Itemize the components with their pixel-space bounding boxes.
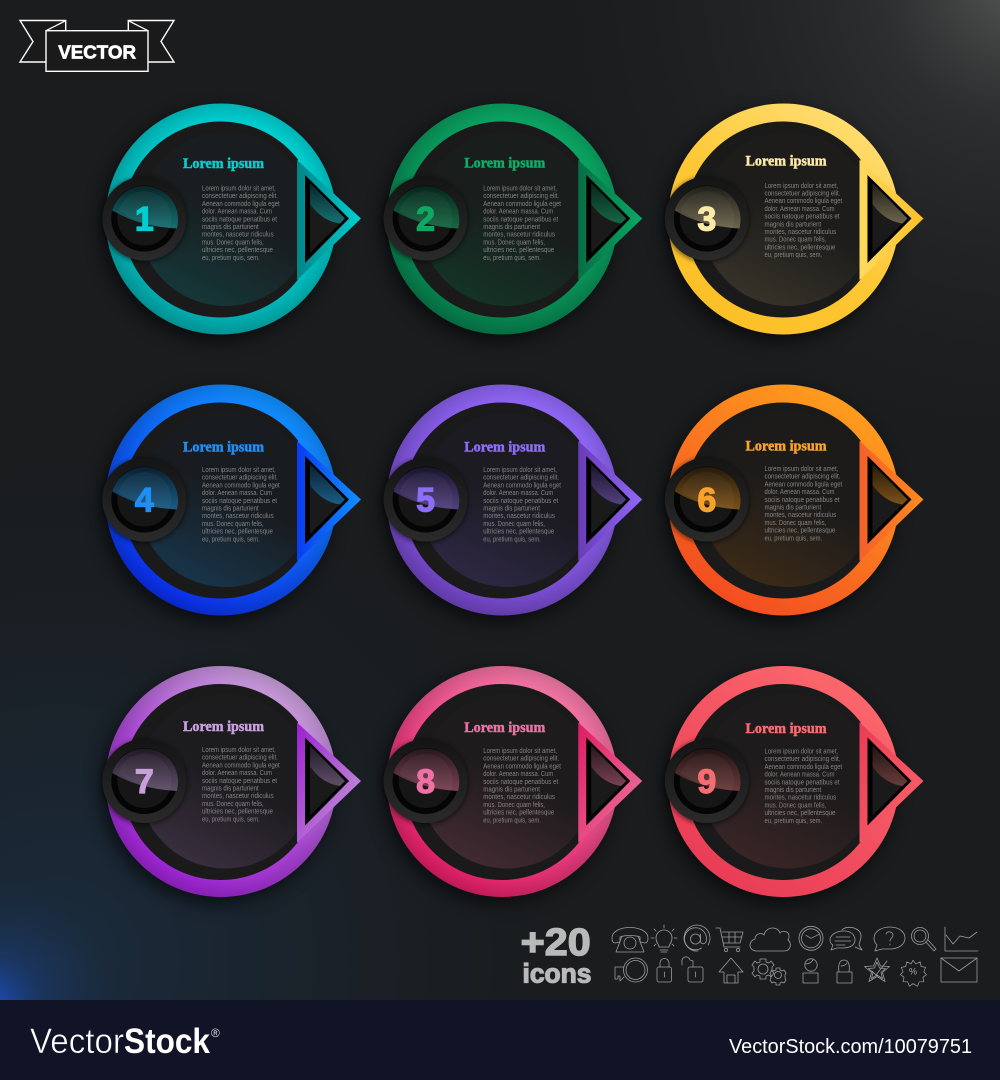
- body text: ultricies nec, pellentesque: [483, 529, 554, 536]
- body text: eu, pretium quis, sem.: [202, 536, 260, 543]
- arrow: [578, 722, 642, 842]
- body text: mus. Donec quam felis,: [764, 237, 826, 244]
- body text: ultricies nec, pellentesque: [764, 528, 836, 535]
- icon: man: [803, 959, 818, 983]
- body text: dolor. Aenean massa. Cum: [202, 770, 272, 777]
- icon: percent burst: [900, 960, 926, 986]
- number badge: 4: [135, 482, 154, 520]
- body text: montes, nascetur ridiculus: [764, 795, 837, 802]
- number badge: [664, 176, 750, 262]
- image id url: VectorStock.com/10079751: [729, 1036, 972, 1058]
- icon: cloud: [750, 928, 790, 951]
- body text: mus. Donec quam felis,: [202, 801, 264, 808]
- card 6: [664, 384, 924, 622]
- card 3: [664, 104, 924, 341]
- body text: consectetuer adipiscing elit.: [202, 193, 278, 200]
- heading: Lorem ipsum: [746, 721, 827, 737]
- body text: [202, 186, 280, 262]
- body text: mus. Donec quam felis,: [764, 520, 826, 527]
- heading: Lorem ipsum: [183, 440, 264, 456]
- body text: Aenean commodo ligula eget: [202, 482, 280, 489]
- body text: Lorem ipsum dolor sit amet,: [483, 467, 557, 474]
- body text: montes, nascetur ridiculus: [483, 513, 555, 520]
- card 9: [664, 666, 924, 904]
- body text: Aenean commodo ligula eget: [483, 201, 561, 208]
- +20 icons label: [521, 922, 592, 988]
- icon: open padlock: [682, 957, 703, 982]
- body text: eu, pretium quis, sem.: [764, 818, 822, 825]
- number badge: 5: [416, 482, 435, 520]
- body text: ultricies nec, pellentesque: [483, 810, 554, 817]
- body text: Aenean commodo ligula eget: [483, 763, 561, 770]
- body text: magnis dis parturient: [202, 506, 259, 512]
- icon: envelope: [941, 958, 977, 982]
- inner panel: [685, 403, 860, 598]
- icon: light bulb: [651, 925, 677, 952]
- body text: magnis dis parturient: [483, 224, 540, 231]
- number badge: [664, 458, 750, 544]
- body text: [483, 467, 561, 543]
- body text: montes, nascetur ridiculus: [764, 512, 837, 519]
- body text: consectetuer adipiscing elit.: [764, 474, 841, 481]
- body text: eu, pretium quis, sem.: [202, 816, 260, 823]
- body text: montes, nascetur ridiculus: [202, 793, 274, 800]
- body text: ultricies nec, pellentesque: [202, 529, 273, 536]
- icon: question bubble: [874, 927, 905, 951]
- ring: [668, 104, 899, 334]
- ring: [387, 384, 618, 616]
- body text: consectetuer adipiscing elit.: [483, 756, 559, 763]
- body text: Aenean commodo ligula eget: [483, 482, 561, 489]
- body text: ultricies nec, pellentesque: [764, 810, 836, 817]
- number badge: 3: [697, 200, 716, 238]
- body text: [764, 466, 842, 542]
- number badge: [383, 458, 469, 544]
- body text: Lorem ipsum dolor sit amet,: [764, 466, 838, 473]
- arrow: [860, 160, 924, 280]
- body text: Lorem ipsum dolor sit amet,: [483, 748, 557, 755]
- logo: [30, 1022, 220, 1061]
- body text: dolor. Aenean massa. Cum: [764, 206, 835, 213]
- body text: magnis dis parturient: [202, 786, 259, 792]
- body text: dolor. Aenean massa. Cum: [764, 772, 835, 779]
- body text: [764, 183, 842, 259]
- body text: montes, nascetur ridiculus: [202, 232, 274, 239]
- body text: sociis natoque penatibus et: [483, 216, 558, 223]
- ribbon: VECTOR: [20, 20, 174, 71]
- icon: star with check: [864, 958, 890, 982]
- body text: consectetuer adipiscing elit.: [202, 755, 278, 762]
- body text: ultricies nec, pellentesque: [483, 247, 554, 254]
- arrow: [297, 441, 361, 561]
- ring: [106, 384, 336, 616]
- body text: mus. Donec quam felis,: [483, 521, 545, 528]
- body text: magnis dis parturient: [202, 224, 259, 231]
- icon: at sign: [684, 925, 710, 951]
- body text: Lorem ipsum dolor sit amet,: [764, 183, 838, 190]
- body text: sociis natoque penatibus et: [202, 498, 277, 505]
- arrow: [578, 441, 642, 561]
- +20 icons label: +20: [521, 922, 591, 964]
- card 1: [101, 104, 361, 341]
- body text: dolor. Aenean massa. Cum: [764, 489, 835, 496]
- inner panel: [404, 122, 579, 318]
- heading: Lorem ipsum: [464, 440, 546, 456]
- body text: consectetuer adipiscing elit.: [483, 475, 559, 482]
- body text: Lorem ipsum dolor sit amet,: [202, 186, 276, 192]
- watermark band: [0, 1000, 1000, 1080]
- body text: mus. Donec quam felis,: [202, 239, 264, 246]
- icon: line chart: [945, 927, 978, 951]
- body text: montes, nascetur ridiculus: [483, 794, 555, 801]
- inner panel: [123, 403, 298, 598]
- body text: sociis natoque penatibus et: [764, 214, 840, 221]
- body text: sociis natoque penatibus et: [483, 498, 558, 505]
- +20 icons label: icons: [522, 958, 592, 988]
- body text: magnis dis parturient: [764, 504, 821, 512]
- body text: Aenean commodo ligula eget: [202, 762, 280, 769]
- body text: mus. Donec quam felis,: [202, 521, 264, 528]
- number badge: 8: [416, 763, 435, 801]
- body text: dolor. Aenean massa. Cum: [202, 490, 272, 497]
- icon: telephone: [612, 928, 648, 952]
- number badge: [101, 458, 187, 544]
- body text: sociis natoque penatibus et: [483, 779, 558, 786]
- body text: mus. Donec quam felis,: [483, 802, 545, 809]
- ring: [387, 666, 618, 897]
- body text: magnis dis parturient: [483, 786, 540, 794]
- card 4: [101, 384, 361, 622]
- body text: magnis dis parturient: [483, 506, 540, 512]
- body text: dolor. Aenean massa. Cum: [483, 490, 553, 497]
- body text: [483, 748, 561, 824]
- body text: eu, pretium quis, sem.: [202, 255, 260, 262]
- card 5: [382, 384, 642, 622]
- body text: magnis dis parturient: [764, 221, 821, 228]
- body text: [483, 186, 561, 262]
- inner panel: [404, 403, 579, 598]
- body text: ultricies nec, pellentesque: [764, 244, 836, 251]
- icon set: [612, 925, 978, 986]
- card 8: [382, 666, 642, 904]
- body text: Aenean commodo ligula eget: [202, 201, 280, 208]
- body text: Aenean commodo ligula eget: [764, 764, 842, 771]
- arrow: [297, 722, 361, 842]
- heading: Lorem ipsum: [746, 438, 827, 454]
- number badge: 9: [697, 763, 716, 801]
- body text: [202, 467, 280, 543]
- logo: Vector: [30, 1022, 124, 1061]
- body text: Aenean commodo ligula eget: [764, 481, 842, 488]
- heading: Lorem ipsum: [183, 156, 264, 172]
- body text: [202, 747, 280, 823]
- icon: padlock: [657, 958, 672, 982]
- body text: eu, pretium quis, sem.: [764, 252, 822, 259]
- arrow: [297, 160, 361, 280]
- body text: eu, pretium quis, sem.: [483, 817, 541, 824]
- arrow: [860, 722, 924, 842]
- icon: chat bubbles: [830, 927, 862, 950]
- number badge: [664, 739, 750, 825]
- icon: key: [615, 958, 648, 982]
- heading: Lorem ipsum: [464, 720, 546, 736]
- body text: Aenean commodo ligula eget: [764, 198, 842, 205]
- inner panel: [685, 684, 860, 880]
- body text: dolor. Aenean massa. Cum: [483, 209, 553, 216]
- number badge: [383, 739, 469, 825]
- body text: dolor. Aenean massa. Cum: [202, 209, 272, 216]
- body text: sociis natoque penatibus et: [202, 216, 277, 223]
- body text: Lorem ipsum dolor sit amet,: [483, 186, 557, 192]
- number badge: 7: [135, 763, 154, 801]
- body text: [764, 748, 842, 825]
- heading: Lorem ipsum: [183, 719, 264, 735]
- body text: montes, nascetur ridiculus: [764, 229, 837, 236]
- icon: gears: [752, 959, 786, 985]
- heading: Lorem ipsum: [746, 154, 827, 170]
- heading: Lorem ipsum: [464, 156, 546, 172]
- body text: consectetuer adipiscing elit.: [202, 475, 278, 482]
- inner panel: [685, 122, 860, 318]
- body text: sociis natoque penatibus et: [202, 778, 277, 785]
- body text: montes, nascetur ridiculus: [202, 513, 274, 520]
- card 7: [101, 666, 361, 904]
- card 2: [382, 104, 642, 341]
- logo: Stock: [124, 1022, 210, 1061]
- body text: Lorem ipsum dolor sit amet,: [764, 748, 838, 756]
- ring: [668, 666, 899, 897]
- number badge: 2: [416, 200, 435, 238]
- inner panel: [123, 684, 298, 880]
- icon: magnifier: [912, 928, 936, 951]
- arrow: [578, 160, 642, 280]
- ring: [668, 384, 899, 616]
- number badge: [101, 176, 187, 262]
- number badge: [383, 176, 469, 262]
- body text: ultricies nec, pellentesque: [202, 247, 273, 254]
- body text: consectetuer adipiscing elit.: [764, 190, 841, 198]
- body text: consectetuer adipiscing elit.: [764, 756, 841, 763]
- body text: sociis natoque penatibus et: [764, 497, 840, 504]
- body text: eu, pretium quis, sem.: [483, 255, 541, 262]
- body text: dolor. Aenean massa. Cum: [483, 771, 553, 778]
- inner panel: [404, 684, 579, 880]
- icon: clock: [799, 926, 823, 950]
- icon: percent burst: %: [909, 967, 917, 977]
- body text: montes, nascetur ridiculus: [483, 232, 555, 239]
- number badge: 6: [697, 482, 716, 520]
- body text: eu, pretium quis, sem.: [483, 536, 541, 543]
- ring: [387, 104, 618, 334]
- body text: mus. Donec quam felis,: [764, 802, 826, 809]
- body text: mus. Donec quam felis,: [483, 239, 545, 246]
- body text: sociis natoque penatibus et: [764, 779, 840, 786]
- arrow: [860, 441, 924, 561]
- ring: [106, 666, 336, 897]
- inner panel: [123, 122, 298, 318]
- icon: woman: [837, 960, 852, 983]
- body text: Lorem ipsum dolor sit amet,: [202, 467, 276, 474]
- body text: eu, pretium quis, sem.: [764, 535, 822, 542]
- body text: consectetuer adipiscing elit.: [483, 193, 559, 200]
- icon: shopping cart: [716, 928, 743, 952]
- number badge: [101, 739, 187, 825]
- body text: ultricies nec, pellentesque: [202, 809, 273, 816]
- ring: [106, 104, 336, 334]
- body text: Lorem ipsum dolor sit amet,: [202, 747, 276, 754]
- icon: house: [719, 958, 743, 983]
- body text: magnis dis parturient: [764, 787, 821, 794]
- ribbon: VECTOR: VECTOR: [58, 41, 136, 62]
- number badge: 1: [135, 200, 154, 238]
- logo: ®: [211, 1026, 220, 1040]
